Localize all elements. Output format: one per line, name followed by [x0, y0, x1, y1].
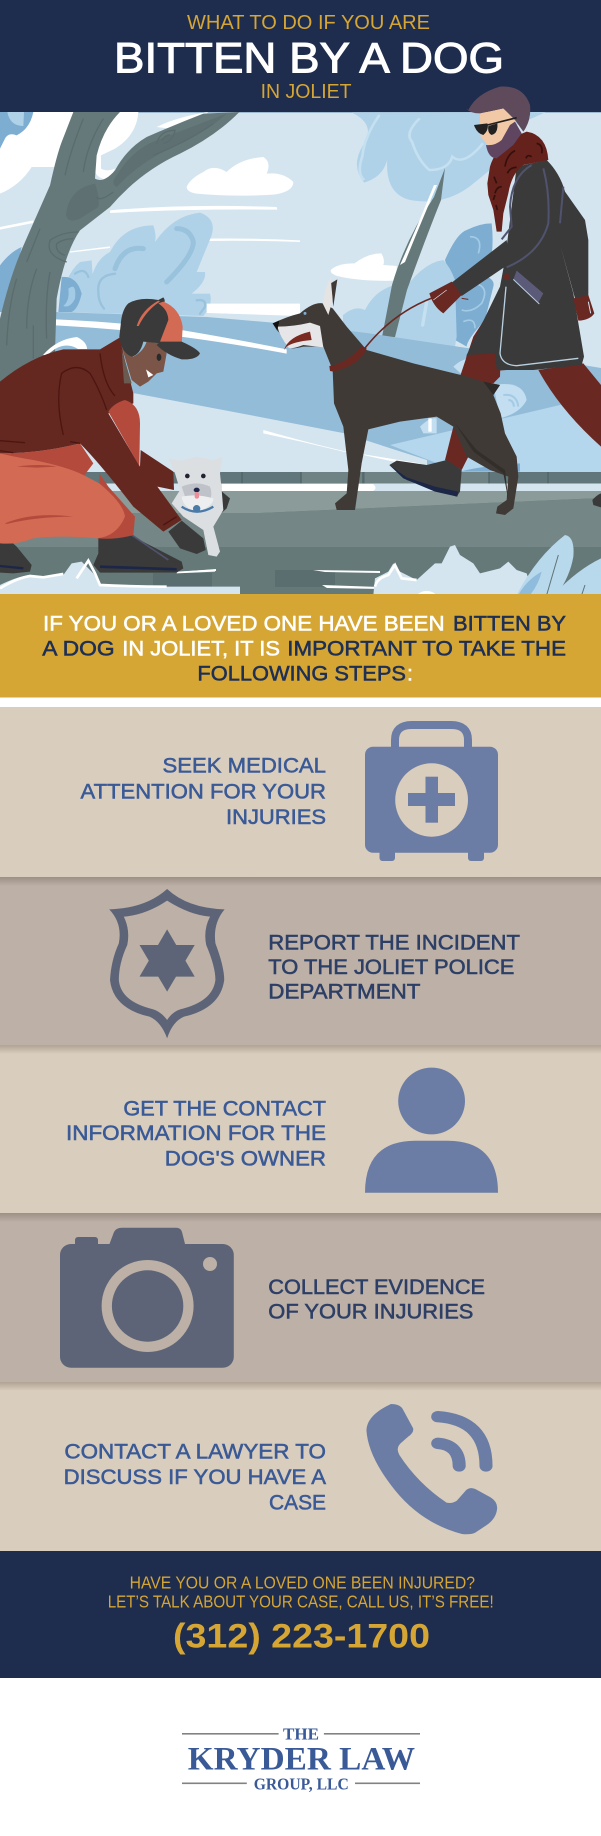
road	[0, 484, 601, 594]
panel: report the incident	[0, 877, 601, 1045]
step text: CASE	[269, 1490, 326, 1514]
tree trunk	[0, 112, 239, 389]
title line: in joliet: IN JOLIET	[261, 81, 352, 103]
phone number: (312) 223-1700	[173, 1617, 430, 1655]
step text: INJURIES	[226, 805, 326, 829]
walker arm	[452, 240, 510, 296]
illustration background: park scenery	[0, 112, 601, 595]
dog walker upper body	[429, 87, 594, 373]
step text	[268, 1275, 485, 1324]
large dog	[273, 277, 518, 515]
upper right bush and cloud	[331, 112, 546, 281]
step text: DEPARTMENT	[268, 980, 420, 1004]
intro text: IN JOLIET, IT IS	[122, 637, 280, 661]
panel: contact a lawyer	[0, 1382, 601, 1551]
step text	[64, 1440, 327, 1514]
intro text: BITTEN BY	[453, 612, 566, 636]
intro text: IMPORTANT TO TAKE THE	[287, 637, 566, 661]
step text	[66, 1096, 326, 1170]
footer call to action	[0, 1551, 601, 1678]
right foreground snow and bush	[373, 535, 601, 595]
step text	[80, 754, 326, 829]
walker legs and shoe	[389, 320, 601, 508]
intro band	[0, 594, 601, 698]
step text: CONTACT A LAWYER TO	[64, 1440, 326, 1464]
thin tree	[382, 168, 445, 337]
call to action text: HAVE YOU OR A LOVED ONE BEEN INJURED?	[130, 1573, 475, 1593]
step text: GET THE CONTACT	[123, 1096, 326, 1120]
footer call to action: LET’S TALK ABOUT YOUR CASE, CALL US, IT’S FREE!	[108, 1592, 494, 1612]
logo: the kryder law group: THE	[283, 1725, 319, 1744]
icon: police badge	[109, 889, 225, 1038]
logo: the kryder law group: GROUP, LLC	[254, 1774, 349, 1793]
intro text: :	[407, 662, 413, 686]
icon: medical kit	[365, 725, 498, 861]
intro text	[42, 612, 566, 686]
title: bitten by a dog: BITTEN BY A DOG	[114, 35, 504, 83]
step text: INFORMATION FOR THE	[66, 1121, 326, 1145]
step text: SEEK MEDICAL	[162, 754, 326, 778]
step text: ATTENTION FOR YOUR	[80, 780, 326, 804]
panel: get contact information	[0, 1045, 601, 1213]
header banner	[0, 0, 601, 112]
step text: DOG'S OWNER	[165, 1146, 326, 1170]
leash	[365, 298, 432, 348]
intro text: A DOG	[42, 637, 115, 661]
step text: OF YOUR INJURIES	[268, 1300, 473, 1324]
intro text: FOLLOWING STEPS	[197, 662, 406, 686]
logo: the kryder law group	[182, 1725, 420, 1793]
logo: the kryder law group: KRYDER LAW	[188, 1741, 415, 1777]
walker head	[466, 87, 530, 158]
icon: telephone	[366, 1404, 497, 1534]
icon: person	[365, 1068, 498, 1193]
icon: camera	[60, 1228, 234, 1368]
small white dog	[168, 457, 223, 557]
step text: DISCUSS IF YOU HAVE A	[64, 1465, 327, 1489]
sky, snow, clouds and left bushes	[0, 112, 300, 316]
title line: what to do: WHAT TO DO IF YOU ARE	[187, 12, 430, 34]
step text: REPORT THE INCIDENT	[268, 930, 520, 954]
crouching person	[0, 297, 230, 573]
step text	[268, 930, 520, 1004]
left foreground snow	[0, 561, 240, 595]
step text: TO THE JOLIET POLICE	[268, 955, 514, 979]
hills	[55, 312, 601, 472]
panel: collect evidence	[0, 1213, 601, 1382]
intro text: IF YOU OR A LOVED ONE HAVE BEEN	[43, 612, 445, 636]
figures in front: dog and crouching person	[0, 277, 518, 573]
snow mound behind jacket	[43, 337, 87, 355]
step text: COLLECT EVIDENCE	[268, 1275, 485, 1299]
bushes behind walker	[400, 223, 494, 347]
panel: seek medical attention	[0, 707, 601, 877]
white snow streak across hill	[56, 319, 287, 354]
walker scarf	[487, 132, 548, 232]
low wall	[83, 472, 601, 484]
walker gloves	[429, 282, 594, 321]
